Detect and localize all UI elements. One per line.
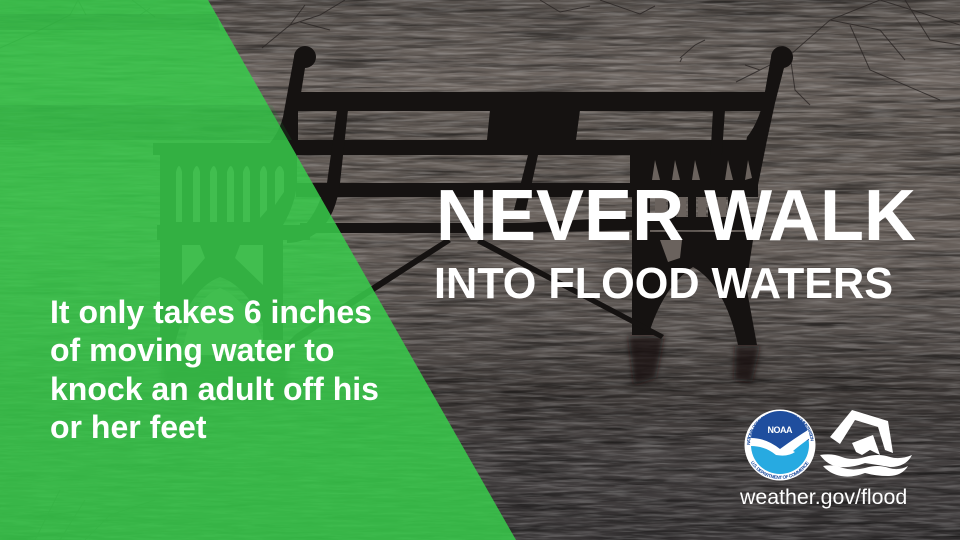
title line: never walk: NEVER WALK	[436, 176, 916, 256]
body text on green panel: knock an adult off his	[50, 371, 379, 407]
title line: into flood waters: INTO FLOOD WATERS	[434, 260, 893, 308]
body text on green panel	[50, 294, 379, 445]
icon: NOAA logo: NOAA	[768, 425, 793, 435]
left ground brace	[280, 238, 451, 350]
green diagonal panel	[0, 0, 516, 540]
right arm lattice	[630, 155, 758, 183]
right seat balusters	[668, 190, 745, 220]
title	[434, 176, 916, 308]
icon: NOAA logo	[744, 410, 816, 480]
back struts	[287, 110, 348, 243]
right back post	[738, 46, 793, 185]
icon: flooded house	[820, 410, 912, 477]
right ground brace	[477, 238, 664, 339]
body text on green panel: It only takes 6 inches	[50, 294, 372, 330]
icon: NOAA logo: NATIONAL OCEANIC AND ATMOSPHERIC ADMINISTRATION	[746, 412, 814, 445]
left arm, posts and legs	[153, 143, 310, 357]
top rail	[296, 92, 766, 111]
icon: NOAA logo: U.S. DEPARTMENT OF COMMERCE	[751, 460, 809, 479]
second rail	[296, 140, 760, 155]
body text on green panel: of moving water to	[50, 332, 334, 368]
right bench lattice gaps	[652, 160, 752, 262]
third rail	[296, 183, 758, 197]
photo: flooded park bench	[153, 46, 793, 357]
photo: bench reflections in water	[160, 336, 760, 400]
centre back slat	[487, 110, 580, 140]
right legs and ornament	[632, 183, 757, 345]
website link: weather.gov/flood	[739, 485, 907, 509]
seat rail	[300, 217, 763, 233]
left back post	[270, 46, 316, 143]
left bench lattice openings	[176, 166, 284, 355]
body text on green panel: or her feet	[50, 409, 207, 445]
